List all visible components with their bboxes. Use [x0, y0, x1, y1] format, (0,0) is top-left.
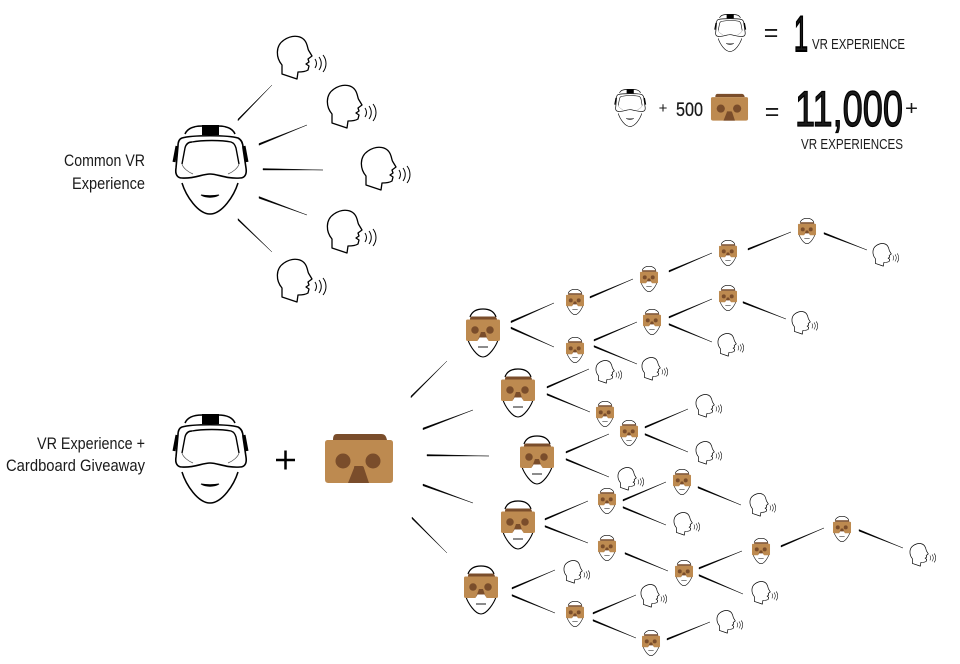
arrows: spreading tree connectors — [411, 232, 903, 640]
recipients: small cardboard heads — [566, 218, 851, 656]
icon: cardboard viewer large — [325, 434, 393, 483]
legend: one VR experience — [715, 6, 905, 62]
number 1: 1 — [794, 6, 808, 62]
heading: Common VR Experience: Common VR — [64, 152, 145, 170]
icon: VR headset head small — [615, 89, 646, 126]
heading: VR Experience + Cardboard Giveaway: VR Experience + — [37, 435, 145, 453]
label: VR experiences: VR EXPERIENCES — [801, 136, 903, 153]
number 11,000: 11,000 — [795, 81, 903, 137]
heading: Common VR Experience — [64, 152, 145, 193]
arrows: headset to five listeners — [238, 85, 323, 252]
number 500: 500 — [676, 100, 703, 121]
heading: Common VR Experience: Experience — [72, 175, 145, 193]
listeners: small speaking heads — [564, 243, 936, 633]
icon: VR headset head large — [174, 125, 247, 214]
plus sign: + — [659, 100, 668, 117]
heading: VR Experience + Cardboard Giveaway: Cardboard Giveaway — [6, 457, 146, 475]
label: VR experience: VR EXPERIENCE — [812, 36, 905, 53]
plus superscript: + — [905, 98, 918, 120]
icon: cardboard viewer small — [711, 94, 748, 121]
diagram: common VR experience — [174, 36, 410, 302]
equals sign: = — [765, 98, 779, 126]
equals sign: = — [764, 19, 778, 47]
diagram: cardboard giveaway spread — [174, 218, 936, 656]
plus sign — [276, 450, 295, 470]
recipients: medium cardboard heads — [464, 309, 554, 614]
icon: VR headset head large — [174, 414, 247, 503]
heading: VR Experience + Cardboard Giveaway — [6, 435, 146, 475]
listeners: five speaking heads — [277, 36, 410, 302]
legend: 11,000+ VR experiences — [615, 81, 918, 153]
icon: VR headset head — [715, 14, 746, 51]
